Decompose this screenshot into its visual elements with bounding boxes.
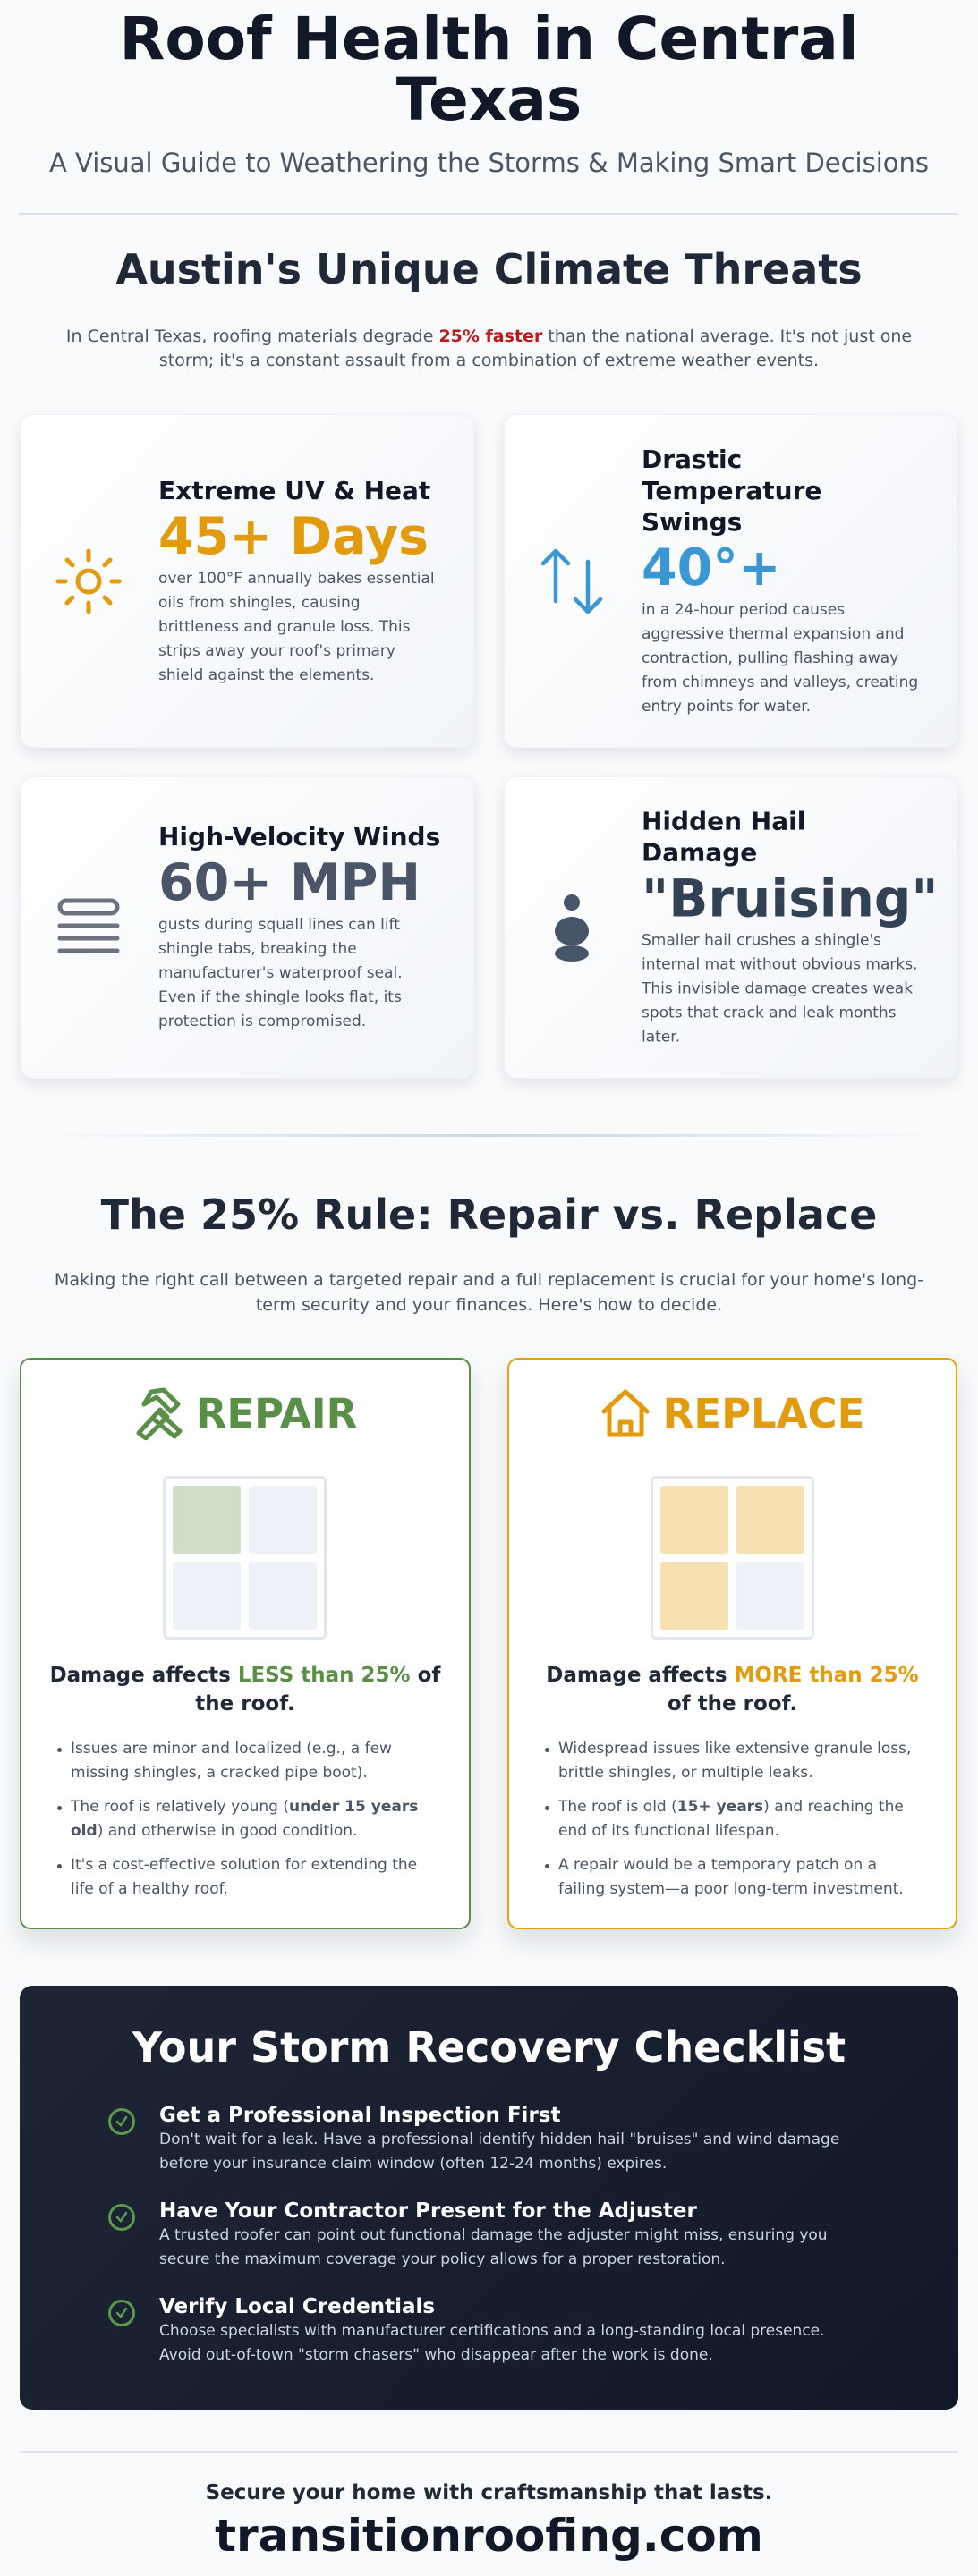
item 3 [108, 2295, 825, 2364]
icon: sun [55, 549, 122, 614]
text: heat: Extreme UV & Heat [158, 476, 430, 504]
title [120, 4, 858, 134]
item 2: A trusted roofer can point out functional damage the adjuster might miss, ensuring you secure the maximum coverage your policy allows for a proper restoration. [159, 2226, 828, 2268]
item 1: Don't wait for a leak. Have a professional identify hidden hail "bruises" and wind damage before your insurance claim window (often 12-24 months) expires. [159, 2131, 839, 2173]
text: temperature: 40°+ [642, 538, 781, 597]
text: heat: over 100°F annually bakes essential oils from shingles, causing brittleness and granule loss. This strips away your roof's primary shield against the elements. [158, 569, 435, 683]
panel: replace [507, 1358, 957, 1929]
panel: temperature [504, 414, 957, 748]
bullets: repair: It's a cost-effective solution for extending the life of a healthy roof. [71, 1856, 417, 1898]
text: hail: Hidden Hail [642, 807, 805, 835]
heading: 25% rule: The 25% Rule: Repair vs. Replace [101, 1191, 877, 1239]
text: temperature: Swings [642, 506, 742, 537]
replace heading: REPLACE [663, 1390, 864, 1436]
panel: wind [21, 776, 474, 1079]
panel: checklist [20, 1986, 958, 2410]
bullets: repair [57, 1740, 418, 1898]
text: heat [158, 476, 435, 683]
text: temperature: Temperature [642, 476, 821, 504]
item 2 [108, 2199, 828, 2268]
text: temperature [642, 444, 918, 716]
text: wind: 60+ MPH [158, 853, 421, 912]
text: wind [158, 822, 440, 1030]
text: temperature: Drastic [642, 444, 742, 474]
bullets: replace [545, 1740, 911, 1898]
text: wind: gusts during squall lines can lift shingle tabs, breaking the manufacturer's waterproof seal. Even if the shingle looks flat, its protection is compromised. [158, 916, 403, 1030]
intro text: In Central Texas, roofing materials degrade 25% faster than the national average. It's not just one storm; it's a constant assault from a combination of extreme weather events. [66, 326, 912, 370]
title: Roof Health in Central [120, 4, 858, 73]
text: heat: 45+ Days [158, 506, 429, 565]
text: hail: "Bruising" [642, 868, 939, 928]
item 3: Choose specialists with manufacturer certifications and a long-standing local presence. Avoid out-of-town "storm chasers" who disappear after the work is done. [159, 2322, 825, 2364]
bullets: replace: A repair would be a temporary patch on a failing system—a poor long-term investment. [558, 1856, 904, 1898]
panel: hail [504, 776, 957, 1079]
title: Texas [396, 65, 582, 134]
bullets: repair: Issues are minor and localized (e.g., a few missing shingles, a cracked pipe boot). [71, 1740, 392, 1782]
text: wind: High-Velocity Winds [158, 822, 440, 852]
damage text: replace: Damage affects MORE than 25% of the roof. [546, 1664, 919, 1716]
text: hail: Damage [642, 837, 757, 868]
text: temperature: in a 24-hour period causes aggressive thermal expansion and contraction, pulling flashing away from chimneys and valleys, creating entry points for water. [642, 601, 918, 716]
bullets: replace: The roof is old (15+ years) and reaching the end of its functional lifespan. [558, 1798, 904, 1840]
subtitle: A Visual Guide to Weathering the Storms & Making Smart Decisions [49, 148, 929, 178]
repair heading: REPAIR [196, 1390, 357, 1436]
item 2: Have Your Contractor Present for the Adjuster [159, 2199, 697, 2223]
bullets: repair: The roof is relatively young (under 15 years old) and otherwise in good condition. [71, 1798, 418, 1840]
icon: wind [57, 898, 120, 953]
footer tagline: Secure your home with craftsmanship that lasts. [206, 2481, 772, 2504]
text: hail: Smaller hail crushes a shingle's internal mat without obvious marks. This invisible damage creates weak spots that crack and leak months later. [642, 932, 917, 1046]
bullets: replace: Widespread issues like extensive granule loss, brittle shingles, or multiple leaks. [558, 1740, 911, 1782]
icon: hail [555, 894, 589, 962]
panel: heat [21, 414, 474, 748]
damage text: repair: Damage affects LESS than 25% of the roof. [50, 1664, 440, 1716]
panel: repair [20, 1358, 471, 1929]
heading: climate threats: Austin's Unique Climate Threats [115, 245, 863, 293]
icon: arrows [540, 549, 603, 614]
grid: replace [650, 1476, 814, 1640]
item 1 [108, 2104, 839, 2173]
text: hail [641, 807, 939, 1046]
repair heading [136, 1388, 357, 1440]
checklist heading: Your Storm Recovery Checklist [132, 2023, 846, 2072]
grid: repair [163, 1476, 327, 1640]
footer url: transitionroofing.com [215, 2510, 763, 2562]
item 3: Verify Local Credentials [159, 2295, 435, 2318]
item 1: Get a Professional Inspection First [159, 2104, 560, 2127]
rule intro: Making the right call between a targeted repair and a full replacement is crucial for your home's long-term security and your finances. Here's how to decide. [55, 1270, 923, 1315]
